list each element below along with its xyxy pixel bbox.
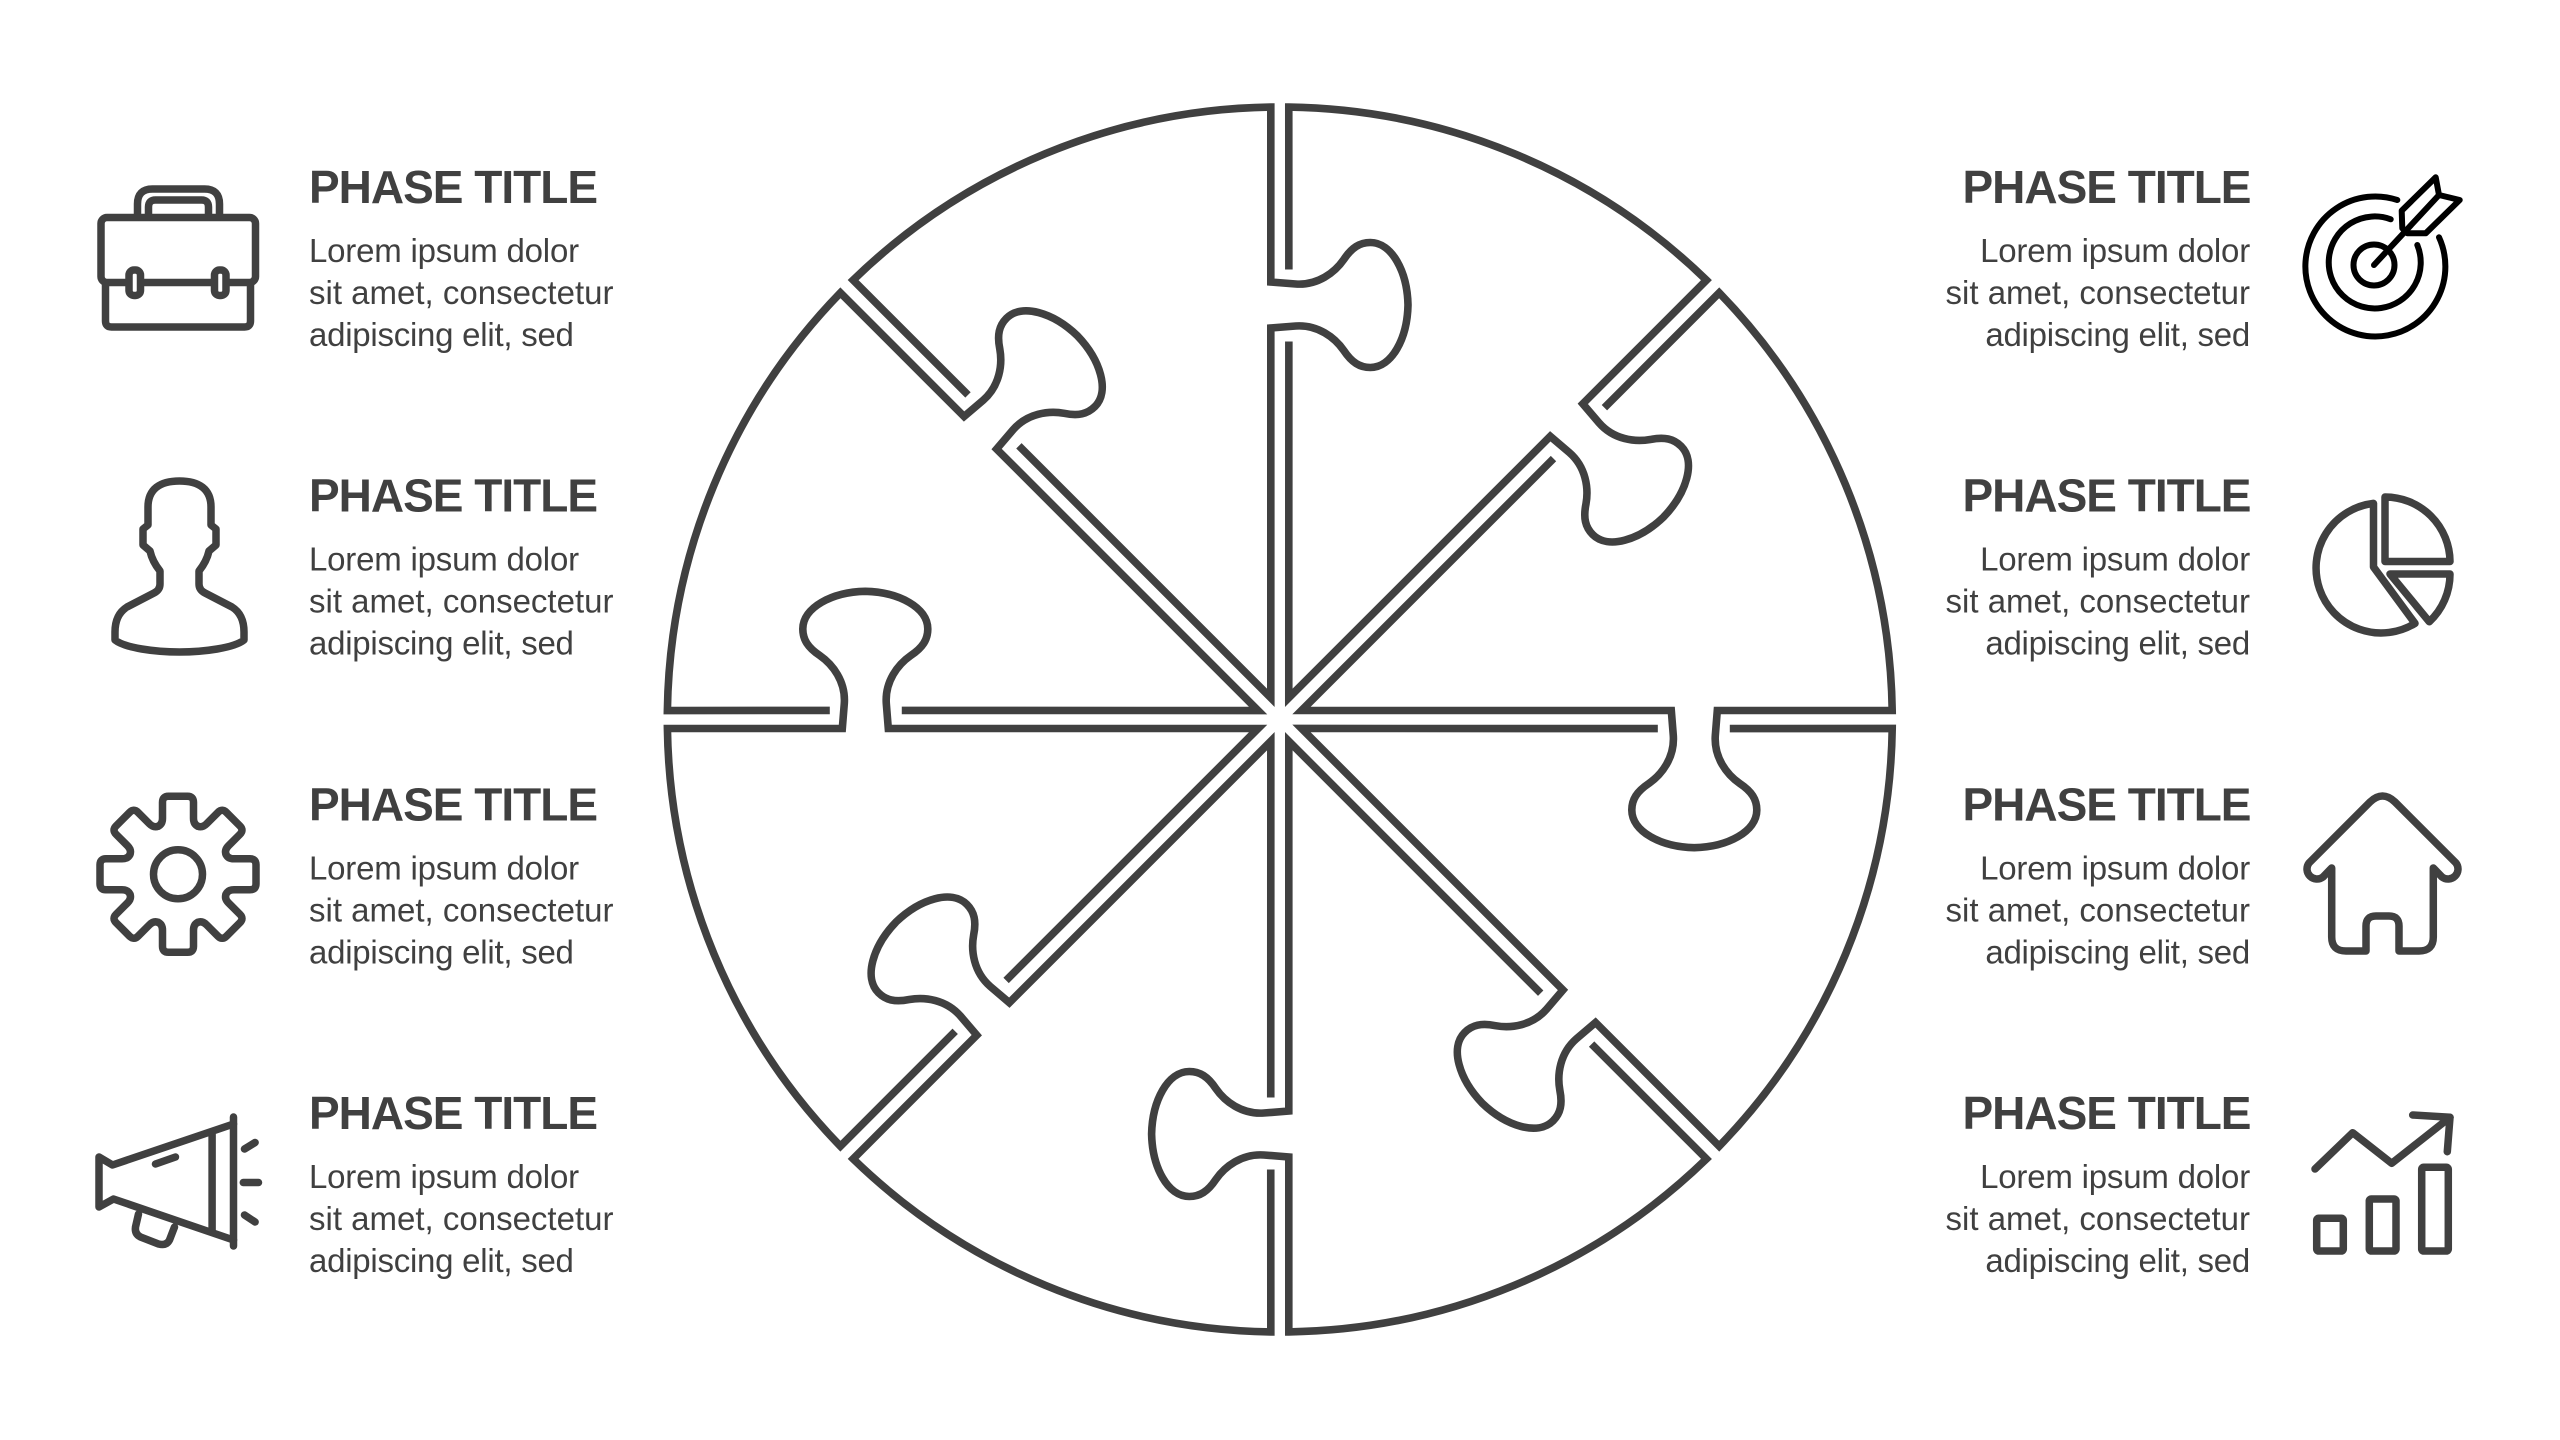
text: left phase 4 — [309, 1087, 613, 1279]
text: right phase 4: Lorem ipsum dolor — [1980, 1158, 2250, 1195]
icon: person — [115, 481, 244, 652]
puzzle piece 4 — [1204, 433, 2015, 1243]
puzzle piece 7 — [667, 591, 1258, 1146]
icon: megaphone — [99, 1117, 258, 1246]
text: left phase 4: adipiscing elit, sed — [309, 1242, 574, 1279]
text: right phase 2 — [1946, 470, 2250, 662]
text: right phase 3: PHASE TITLE — [1962, 778, 2250, 830]
text: right phase 4: sit amet, consectetur — [1946, 1200, 2250, 1237]
puzzle piece 8 — [545, 196, 1355, 1006]
text: left phase 2: sit amet, consectetur — [309, 583, 613, 620]
puzzle piece 2 — [993, 0, 1803, 795]
text: right phase 2: adipiscing elit, sed — [1985, 625, 2250, 662]
text: right phase 2: PHASE TITLE — [1962, 470, 2250, 522]
puzzle piece 5 — [1152, 741, 1706, 1332]
text: left phase 1: adipiscing elit, sed — [309, 316, 574, 353]
text: right phase 4 — [1946, 1087, 2250, 1279]
text: right phase 4: PHASE TITLE — [1962, 1087, 2250, 1139]
icon: pie chart — [2316, 497, 2450, 633]
puzzle piece 6 — [756, 644, 1566, 1440]
icon: briefcase — [101, 189, 256, 327]
text: right phase 1: PHASE TITLE — [1962, 161, 2250, 213]
text: left phase 3 — [309, 778, 613, 970]
text: right phase 3: Lorem ipsum dolor — [1980, 849, 2250, 886]
icon: growth chart — [2315, 1115, 2450, 1251]
text: left phase 3: Lorem ipsum dolor — [309, 849, 579, 886]
text: left phase 4: PHASE TITLE — [309, 1087, 597, 1139]
text: left phase 3: PHASE TITLE — [309, 778, 597, 830]
text: right phase 2: sit amet, consectetur — [1946, 583, 2250, 620]
text: left phase 3: adipiscing elit, sed — [309, 933, 574, 970]
text: left phase 2: adipiscing elit, sed — [309, 625, 574, 662]
puzzle circle — [545, 0, 2015, 1440]
text: left phase 1: Lorem ipsum dolor — [309, 232, 579, 269]
text: left phase 4: Lorem ipsum dolor — [309, 1158, 579, 1195]
puzzle piece 1 — [853, 107, 1408, 698]
text: left phase 1: sit amet, consectetur — [309, 274, 613, 311]
puzzle piece 3 — [1302, 293, 1892, 848]
text: right phase 3: sit amet, consectetur — [1946, 891, 2250, 928]
text: left phase 2: Lorem ipsum dolor — [309, 541, 579, 578]
text: left phase 3: sit amet, consectetur — [309, 891, 613, 928]
text: left phase 2 — [309, 470, 613, 662]
text: right phase 1: sit amet, consectetur — [1946, 274, 2250, 311]
icon: gear — [100, 796, 256, 952]
icon: target with arrow — [2305, 177, 2460, 336]
text: right phase 1 — [1946, 161, 2250, 353]
text: right phase 2: Lorem ipsum dolor — [1980, 541, 2250, 578]
icon: house — [2307, 796, 2458, 951]
text: left phase 1 — [309, 161, 613, 353]
text: right phase 1: adipiscing elit, sed — [1985, 316, 2250, 353]
text: right phase 4: adipiscing elit, sed — [1985, 1242, 2250, 1279]
text: right phase 3: adipiscing elit, sed — [1985, 933, 2250, 970]
text: left phase 4: sit amet, consectetur — [309, 1200, 613, 1237]
text: left phase 2: PHASE TITLE — [309, 470, 597, 522]
text: right phase 3 — [1946, 778, 2250, 970]
text: left phase 1: PHASE TITLE — [309, 161, 597, 213]
text: right phase 1: Lorem ipsum dolor — [1980, 232, 2250, 269]
